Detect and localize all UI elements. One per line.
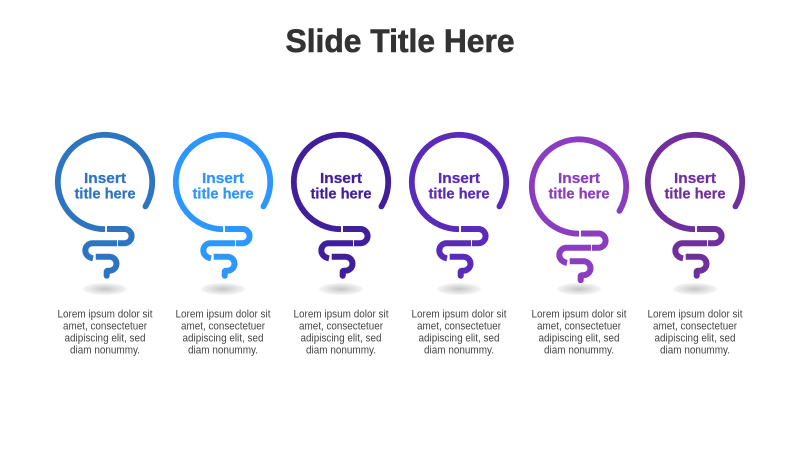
title: Slide Title Here	[286, 23, 514, 59]
text: item 5: amet, consectetuer	[537, 320, 621, 332]
text: item 6: adipiscing elit, sed	[654, 332, 736, 344]
heading: item 6: Insert	[674, 171, 716, 187]
text: item 1: diam nonummy.	[70, 344, 140, 356]
icon: bulb 6	[648, 135, 742, 279]
text: item 1: amet, consectetuer	[63, 320, 147, 332]
panel: item 2	[176, 135, 271, 356]
text: item 6	[648, 308, 743, 356]
heading: item 4	[428, 171, 490, 202]
panel: item 6	[648, 135, 743, 356]
heading: item 6	[664, 171, 726, 202]
shadow 6	[673, 283, 717, 295]
icon: bulb 2	[176, 135, 270, 279]
heading: item 5	[548, 171, 610, 202]
heading: item 1: Insert	[84, 171, 126, 187]
text: item 4: Lorem ipsum dolor sit	[412, 308, 507, 320]
text: item 4: diam nonummy.	[424, 344, 494, 356]
text: item 6: amet, consectetuer	[653, 320, 737, 332]
text: item 2: amet, consectetuer	[181, 320, 265, 332]
text: item 6: diam nonummy.	[660, 344, 730, 356]
text: item 3: adipiscing elit, sed	[300, 332, 382, 344]
text: item 5: diam nonummy.	[544, 344, 614, 356]
heading: item 3: Insert	[320, 171, 362, 187]
shadow 2	[201, 283, 245, 295]
shadow 5	[557, 283, 601, 295]
text: item 1	[58, 308, 153, 356]
text: item 2	[176, 308, 271, 356]
heading: item 6: title here	[664, 186, 726, 202]
text: item 4	[412, 308, 507, 356]
heading: item 5: title here	[548, 186, 610, 202]
text: item 5: adipiscing elit, sed	[538, 332, 620, 344]
heading: item 4: Insert	[438, 171, 480, 187]
text: item 3	[294, 308, 389, 356]
heading: item 1	[74, 171, 136, 202]
heading: item 2	[192, 171, 254, 202]
text: item 3: amet, consectetuer	[299, 320, 383, 332]
icon: bulb 4	[412, 135, 506, 279]
text: item 3: Lorem ipsum dolor sit	[294, 308, 389, 320]
text: item 6: Lorem ipsum dolor sit	[648, 308, 743, 320]
icon: bulb 1	[58, 135, 152, 279]
heading: item 2: title here	[192, 186, 254, 202]
text: item 4: adipiscing elit, sed	[418, 332, 500, 344]
heading: item 2: Insert	[202, 171, 244, 187]
panel: item 5	[532, 139, 627, 356]
text: item 1: adipiscing elit, sed	[64, 332, 146, 344]
heading: item 3	[310, 171, 372, 202]
text: item 2: Lorem ipsum dolor sit	[176, 308, 271, 320]
shadow 3	[319, 283, 363, 295]
text: item 3: diam nonummy.	[306, 344, 376, 356]
icon: bulb 3	[294, 135, 388, 279]
panel: item 3	[294, 135, 389, 356]
text: item 5: Lorem ipsum dolor sit	[532, 308, 627, 320]
text: item 2: diam nonummy.	[188, 344, 258, 356]
panel: item 4	[412, 135, 507, 356]
heading: item 1: title here	[74, 186, 136, 202]
text: item 5	[532, 308, 627, 356]
shadow 1	[83, 283, 127, 295]
heading: item 4: title here	[428, 186, 490, 202]
heading: item 3: title here	[310, 186, 372, 202]
panel: item 1	[58, 135, 153, 356]
text: item 1: Lorem ipsum dolor sit	[58, 308, 153, 320]
shadow 4	[437, 283, 481, 295]
text: item 4: amet, consectetuer	[417, 320, 501, 332]
icon: bulb 5	[532, 139, 626, 283]
heading: item 5: Insert	[558, 171, 600, 187]
text: item 2: adipiscing elit, sed	[182, 332, 264, 344]
